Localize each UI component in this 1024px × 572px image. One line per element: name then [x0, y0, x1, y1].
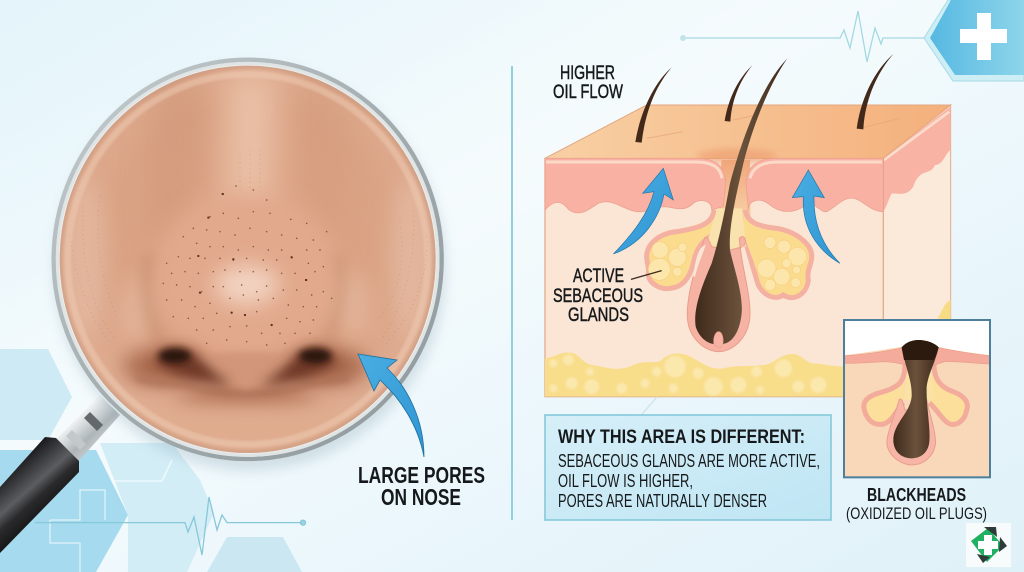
lens rim [54, 60, 442, 459]
label: active sebaceous glands [553, 266, 643, 326]
ECG line top right [680, 11, 924, 62]
body text [558, 451, 820, 511]
sebaceous glands [647, 210, 812, 298]
magnifying glass with nose [50, 50, 450, 470]
skin cross-section diagram [545, 54, 951, 397]
label: higher oil flow: HIGHER [560, 63, 615, 84]
label: large pores on nose: ON NOSE [381, 484, 461, 510]
arrow: points to pores [358, 354, 424, 457]
follicle [887, 399, 936, 465]
label: higher oil flow [553, 63, 623, 103]
top face [545, 105, 951, 158]
pores [163, 186, 332, 345]
icon: logo [966, 523, 1011, 567]
dermis [844, 347, 990, 477]
panel: why this area is different [545, 397, 831, 520]
label: active sebaceous glands: ACTIVE [573, 266, 624, 287]
leader line [631, 271, 662, 279]
label: active sebaceous glands: GLANDS [568, 305, 629, 326]
epidermis [844, 347, 990, 366]
label: blackheads [846, 485, 987, 523]
body text: OIL FLOW IS HIGHER, [558, 471, 693, 491]
nose photo [60, 66, 436, 453]
glands [864, 365, 967, 424]
body text: SEBACEOUS GLANDS ARE MORE ACTIVE, [558, 451, 820, 471]
label: large pores on nose [358, 462, 485, 510]
main hair [695, 58, 787, 344]
divider [511, 66, 513, 520]
body text: PORES ARE NATURALLY DENSER [558, 491, 767, 511]
decorative hexagons lower left [0, 349, 302, 572]
panel: blackhead inset [844, 320, 990, 477]
label: higher oil flow: OIL FLOW [553, 82, 623, 103]
plug [893, 340, 939, 458]
ECG line lower left [35, 497, 306, 555]
icon: medical cross hexagon [924, 0, 1024, 81]
front face [545, 158, 883, 397]
label: blackheads: BLACKHEADS [867, 485, 966, 505]
label: large pores on nose: LARGE PORES [358, 462, 485, 488]
shadow under nose [123, 349, 207, 384]
magnifying glass handle [0, 395, 120, 553]
short hairs [635, 54, 893, 143]
epidermis layer [545, 158, 883, 213]
arrows: oil flow [613, 168, 840, 263]
label: active sebaceous glands: SEBACEOUS [553, 286, 643, 307]
lens shadow [54, 65, 446, 471]
right face [883, 105, 951, 320]
follicle sheath [687, 237, 750, 352]
follicle canal [707, 160, 751, 250]
heading: WHY THIS AREA IS DIFFERENT: [558, 426, 805, 448]
fat layer [545, 353, 847, 397]
slits [694, 247, 753, 283]
